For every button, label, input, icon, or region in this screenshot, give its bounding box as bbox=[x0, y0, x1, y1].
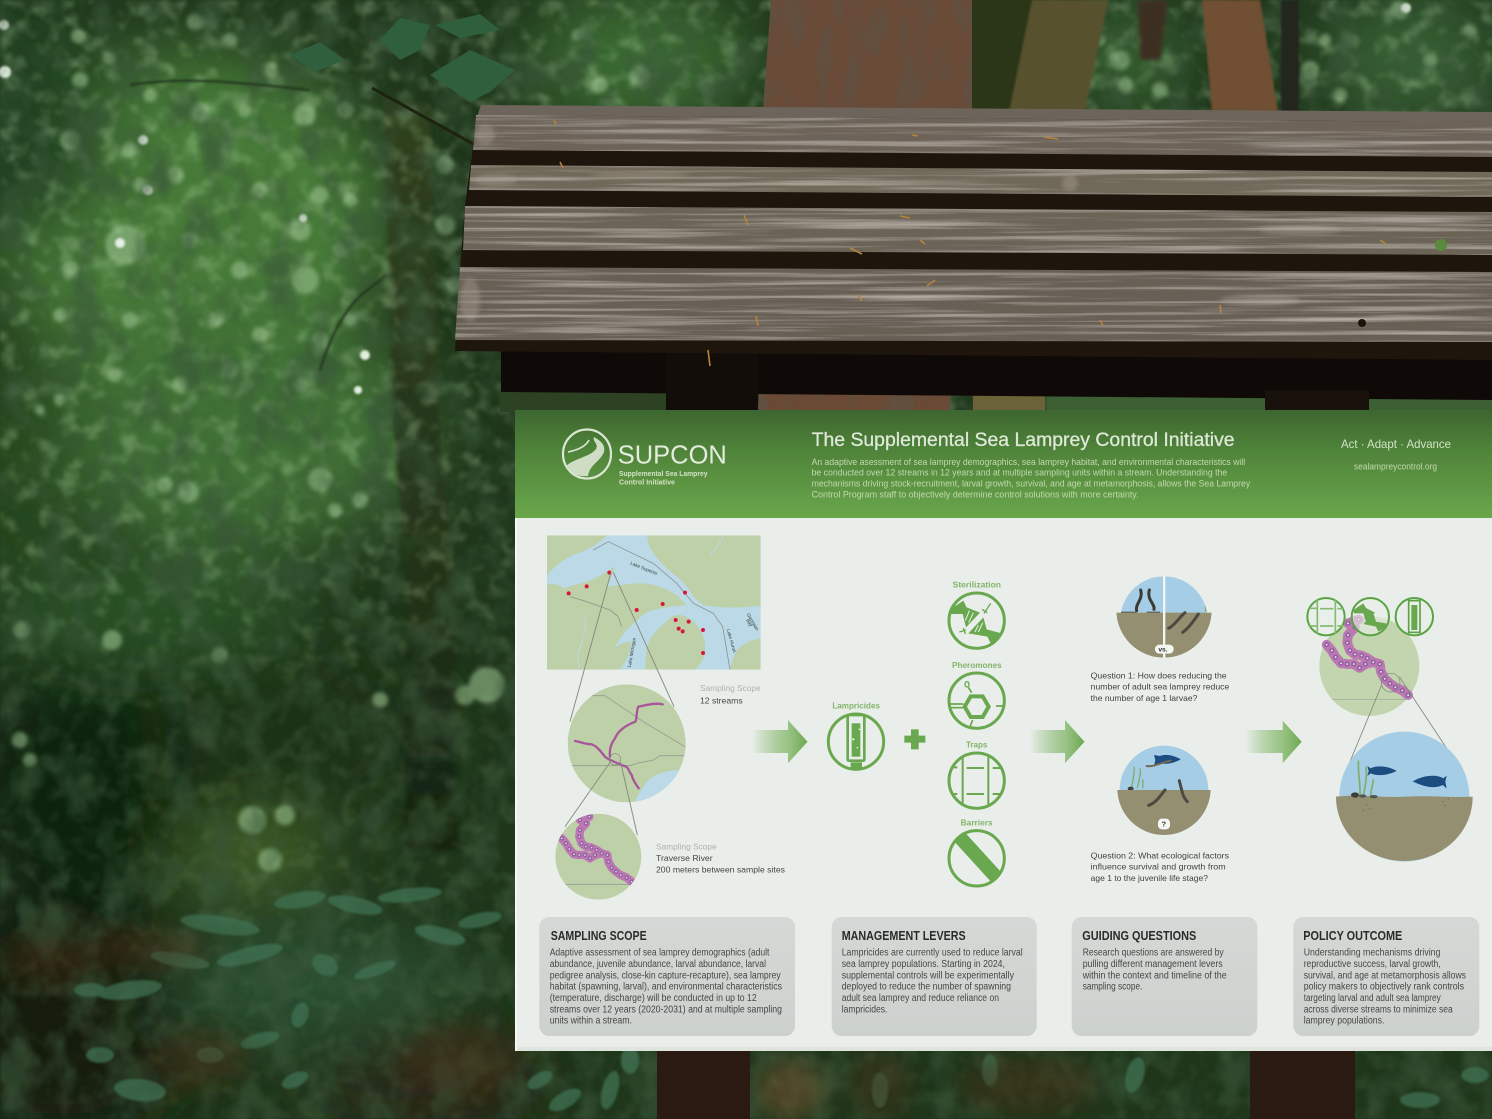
sampling scope diagram bbox=[547, 535, 785, 900]
wooden kiosk roof bbox=[455, 105, 1492, 412]
shrub leaves foreground bbox=[74, 885, 1489, 1116]
kiosk posts below the panel bbox=[657, 1048, 1355, 1119]
great lakes map: Georgian bbox=[746, 612, 760, 632]
lampricides icon bbox=[828, 701, 884, 770]
maple leaves near the roof bbox=[290, 14, 515, 102]
SUPCON wordmark: Supplemental Sea Lamprey bbox=[619, 469, 708, 478]
tagline: Act · Adapt · Advance bbox=[1341, 437, 1451, 451]
great lakes map: Lake Michigan bbox=[627, 637, 637, 668]
sampling scope text box: units within a stream. bbox=[550, 1016, 632, 1027]
question 1 illustration: vs. bbox=[1158, 646, 1168, 653]
management levers text box: sea lamprey populations. Starting in 2024, bbox=[842, 959, 1005, 970]
sampling scope label 2 bbox=[656, 841, 785, 875]
outcome lever icons bbox=[1307, 598, 1433, 635]
management levers text box: deployed to reduce the number of spawning bbox=[842, 982, 1011, 993]
policy outcome text box: Understanding mechanisms driving bbox=[1304, 948, 1440, 959]
guiding questions text box: GUIDING QUESTIONS bbox=[1082, 929, 1196, 943]
sampling scope text box: abundance, juvenile abundance, larval abundance, larval bbox=[550, 959, 766, 970]
management levers text box: Lampricides are currently used to reduce larval bbox=[842, 948, 1023, 959]
pheromones icon bbox=[949, 660, 1004, 728]
sampling scope label 2: Traverse River bbox=[656, 853, 713, 863]
outcome river scene bbox=[1336, 732, 1473, 862]
logo bbox=[563, 430, 611, 478]
SUPCON information panel bbox=[515, 410, 1492, 1051]
title: The Supplemental Sea Lamprey Control Initiative bbox=[812, 429, 1235, 451]
SUPCON wordmark: Control Initiative bbox=[619, 478, 675, 487]
great lakes map: Lake Superior bbox=[630, 561, 659, 576]
header description: mechanisms driving stock-recruitment, larval growth, survival, and age at metamorphosis, allows the Sea Lamprey bbox=[812, 479, 1250, 490]
management levers text box bbox=[832, 917, 1037, 1036]
guiding question and outcome illustrations bbox=[1091, 570, 1473, 883]
sterilization icon: Sterilization bbox=[953, 579, 1001, 589]
sampling scope text box: (temperature, discharge) will be conducted in up to 12 bbox=[550, 993, 757, 1004]
great lakes map: Bay bbox=[745, 618, 754, 628]
barriers icon bbox=[949, 817, 1004, 886]
sampling scope text box: streams over 12 years (2020-2031) and at multiple sampling bbox=[550, 1004, 782, 1015]
website: sealampreycontrol.org bbox=[1354, 462, 1437, 472]
management levers text box: adult sea lamprey and reduce reliance on bbox=[842, 993, 999, 1004]
guiding questions text box: Research questions are answered by bbox=[1083, 948, 1224, 959]
arrow: levers to questions bbox=[1030, 720, 1084, 763]
sampling scope text box: SAMPLING SCOPE bbox=[551, 929, 647, 943]
guiding questions text box bbox=[1072, 917, 1257, 1036]
barriers icon: Barriers bbox=[961, 817, 993, 827]
policy outcome text box: across diverse streams to minimize sea bbox=[1304, 1004, 1453, 1015]
question 2 text bbox=[1091, 850, 1230, 883]
question 2 text: influence survival and growth from bbox=[1091, 862, 1226, 872]
policy outcome text box bbox=[1293, 917, 1479, 1036]
plus sign bbox=[904, 729, 925, 749]
SUPCON wordmark bbox=[618, 439, 727, 487]
header description: Control Program staff to objectively determine control solutions with more certainty. bbox=[812, 490, 1139, 501]
policy outcome text box: targeting larval and adult sea lamprey bbox=[1304, 993, 1441, 1004]
outcome connector lines bbox=[1350, 677, 1447, 762]
sterilization icon bbox=[948, 579, 1005, 648]
pheromones icon: Pheromones bbox=[952, 660, 1002, 670]
sample sites zoom circle bbox=[555, 814, 641, 900]
header description: An adaptive asessment of sea lamprey demographics, sea lamprey habitat, and environmental characteristics will bbox=[812, 457, 1245, 468]
forest floor tones bbox=[5, 930, 1100, 1119]
watershed zoom circle bbox=[568, 684, 687, 805]
lampricides icon: Lampricides bbox=[832, 701, 880, 711]
question 2 text: age 1 to the juvenile life stage? bbox=[1091, 873, 1208, 883]
guiding questions text box: sampling scope. bbox=[1083, 982, 1142, 993]
large background trunk bbox=[384, 95, 458, 850]
sampling scope text box bbox=[539, 917, 795, 1036]
guiding questions text box: within the context and timeline of the bbox=[1082, 970, 1227, 981]
question 1 text: Question 1: How does reducing the bbox=[1091, 670, 1227, 680]
great lakes map: Lake Huron bbox=[726, 629, 737, 653]
management levers text box: supplemental controls will be experimentally bbox=[842, 970, 1014, 981]
policy outcome text box: survival, and age at metamorphosis allows bbox=[1304, 970, 1466, 981]
question 1 illustration bbox=[1116, 576, 1212, 658]
traps icon: Traps bbox=[966, 739, 987, 749]
tree trunks behind the kiosk bbox=[500, 0, 1492, 412]
SUPCON wordmark: SUPCON bbox=[618, 439, 727, 469]
sampling scope label 1: 12 streams bbox=[700, 695, 743, 705]
sampling scope label 2: 200 meters between sample sites bbox=[656, 865, 785, 875]
arrow: questions to outcome bbox=[1245, 721, 1302, 763]
header band bbox=[515, 410, 1492, 518]
question 1 text: number of adult sea lamprey reduce bbox=[1091, 682, 1230, 692]
question 2 illustration: ? bbox=[1162, 820, 1167, 829]
management lever icons bbox=[828, 579, 1005, 886]
question 2 text: Question 2: What ecological factors bbox=[1091, 850, 1230, 860]
sampling scope text box: pedigree analysis, close-kin capture-recapture), sea lamprey bbox=[550, 970, 781, 981]
header description: be conducted over 12 streams in 12 years and at multiple sampling units within a stream. Understanding the bbox=[812, 468, 1227, 479]
sampling scope label 1: Sampling Scope bbox=[700, 683, 761, 693]
policy outcome text box: lamprey populations. bbox=[1304, 1016, 1384, 1027]
policy outcome text box: POLICY OUTCOME bbox=[1303, 929, 1402, 943]
sampling scope label 2: Sampling Scope bbox=[656, 841, 717, 851]
question 2 illustration bbox=[1117, 746, 1211, 835]
sampling scope text box: Adaptive assessment of sea lamprey demographics (adult bbox=[550, 948, 770, 959]
header description bbox=[812, 457, 1250, 501]
question 1 text: the number of age 1 larvae? bbox=[1091, 693, 1198, 703]
policy outcome text box: reproductive success, larval growth, bbox=[1304, 959, 1441, 970]
management levers text box: lampricides. bbox=[842, 1004, 887, 1015]
policy outcome text box: policy makers to objectively rank controls bbox=[1304, 982, 1464, 993]
great lakes map bbox=[547, 535, 761, 670]
question 1 text bbox=[1091, 670, 1230, 703]
outcome map circle bbox=[1319, 616, 1419, 716]
arrow: scope to levers bbox=[752, 720, 808, 763]
zoom connector lines bbox=[565, 572, 674, 835]
traps icon bbox=[948, 739, 1005, 808]
sampling scope label 1 bbox=[700, 683, 761, 705]
sampling scope text box: habitat (spawning, larval), and environmental characteristics bbox=[550, 982, 782, 993]
guiding questions text box: pulling different management levers bbox=[1083, 959, 1223, 970]
management levers text box: MANAGEMENT LEVERS bbox=[842, 929, 966, 943]
